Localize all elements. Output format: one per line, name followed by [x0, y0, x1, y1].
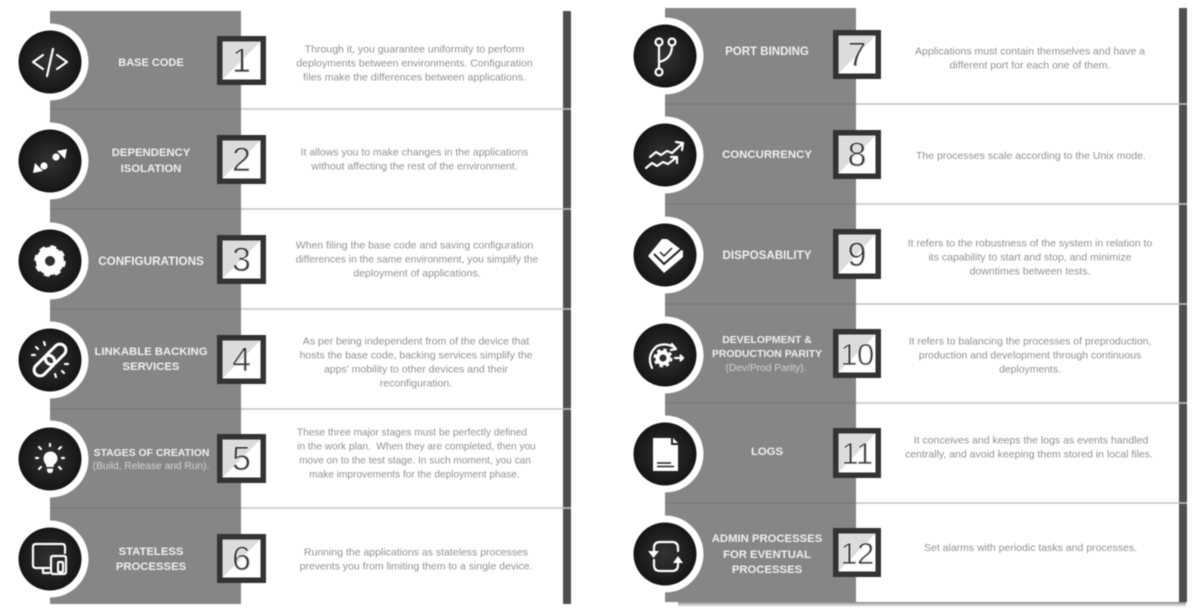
factor 3: configurations	[12, 222, 539, 300]
number box: 9	[848, 236, 866, 274]
factor 6: stateless processes	[12, 520, 532, 598]
number box	[217, 36, 266, 85]
description: Through it, you guarantee uniformity to perform	[305, 44, 524, 56]
number box	[217, 335, 266, 384]
description: downtimes between tests.	[970, 266, 1090, 278]
factor 5: stages of creation	[12, 420, 536, 498]
icon: light bulb	[12, 420, 88, 498]
description: make improvements for the deployment phase.	[309, 470, 520, 480]
icon: gear with arrow	[626, 316, 704, 394]
description: It refers to the robustness of the system in relation to	[908, 238, 1152, 250]
number box	[833, 428, 881, 478]
title: ISOLATION	[121, 163, 181, 175]
description: in the work plan. When they are completed, then you	[297, 442, 536, 452]
description: production and development through continuous	[919, 350, 1141, 362]
icon: branching fork	[626, 18, 704, 94]
description: It refers to balancing the processes of preproduction,	[909, 336, 1151, 348]
title: LOGS	[751, 446, 783, 458]
number box	[833, 329, 881, 378]
number box: 3	[232, 241, 251, 279]
icon: document	[626, 416, 704, 492]
number box	[217, 235, 266, 284]
title: (Dev/Prod Parity).	[726, 363, 806, 374]
title: PROCESSES	[116, 561, 187, 573]
title: LINKABLE BACKING	[95, 346, 208, 358]
factor 9: disposability	[626, 216, 1152, 294]
title	[93, 448, 209, 472]
factor 7: port binding	[626, 18, 1145, 94]
title: PRODUCTION PARITY	[712, 349, 822, 360]
icon: stacked check marks	[626, 216, 704, 294]
title: FOR EVENTUAL	[723, 549, 811, 561]
number box: 4	[232, 341, 251, 379]
icon: refresh arrows	[626, 516, 704, 592]
description: It allows you to make changes in the applications	[301, 146, 528, 158]
description: Running the applications as stateless processes	[304, 546, 528, 558]
description: These three major stages must be perfectly defined	[297, 428, 527, 438]
icon: devices	[12, 520, 88, 598]
description: The processes scale according to the Unix mode.	[916, 150, 1146, 162]
description: hosts the base code, backing services simplify the	[300, 350, 533, 362]
number box	[833, 130, 881, 179]
number box: 7	[848, 36, 866, 74]
description: As per being independent from of the device that	[303, 336, 529, 348]
number box	[833, 528, 881, 577]
number box	[833, 229, 881, 279]
description: its capability to start and stop, and minimize	[928, 252, 1132, 264]
icon: broken chain	[12, 322, 88, 398]
factor 8: concurrency	[626, 116, 1146, 194]
description: Applications must contain themselves and have a	[915, 46, 1145, 58]
description: apps' mobility to other devices and their	[324, 364, 509, 376]
description: move on to the test stage. In such moment, you can	[299, 456, 531, 466]
factor 1: base code	[12, 24, 533, 100]
number box	[833, 30, 881, 79]
description: When filing the base code and saving configuration	[296, 240, 533, 252]
title: STATELESS	[119, 546, 184, 558]
factor 2: dependency isolation	[12, 122, 528, 200]
number box: 6	[232, 540, 251, 578]
number box: 2	[232, 141, 251, 179]
number box: 11	[841, 436, 873, 471]
panel: right column, factors 7 to 12	[626, 8, 1187, 607]
number box: 1	[232, 42, 251, 80]
description: reconfiguration.	[380, 378, 452, 390]
description: deployment of applications.	[353, 268, 481, 280]
title: DEVELOPMENT &	[722, 335, 812, 346]
factor 11: logs	[626, 416, 1153, 492]
title	[712, 335, 822, 374]
title: DISPOSABILITY	[723, 249, 812, 262]
description: without affecting the rest of the environment.	[310, 160, 518, 172]
description: It conceives and keeps the logs as events handled	[914, 434, 1148, 446]
description: deployments between environments. Configuration	[296, 58, 533, 70]
description: deployments.	[999, 364, 1061, 376]
title: ADMIN PROCESSES	[712, 533, 823, 545]
title: DEPENDENCY	[112, 147, 191, 159]
number box: 10	[840, 337, 874, 372]
title: CONFIGURATIONS	[98, 255, 204, 268]
factor 12: admin processes	[626, 516, 1137, 592]
title: BASE CODE	[118, 57, 184, 69]
description: files make the differences between applications.	[303, 72, 526, 84]
panel: left column, factors 1 to 6	[12, 11, 571, 604]
description: centrally, and avoid keeping them stored in local files.	[905, 448, 1153, 460]
title: SERVICES	[123, 361, 180, 373]
number box: 12	[840, 536, 874, 571]
title: STAGES OF CREATION	[94, 448, 209, 459]
icon: diagonal arrows	[12, 122, 88, 200]
number box	[217, 434, 266, 483]
number box: 8	[848, 136, 866, 174]
title: PORT BINDING	[725, 46, 809, 58]
title: PROCESSES	[732, 564, 803, 576]
number box	[217, 135, 266, 184]
title: (Build, Release and Run).	[93, 461, 209, 472]
icon: double trend arrows	[626, 116, 704, 194]
description: prevents you from limiting them to a single device.	[300, 560, 532, 572]
icon: gear	[12, 222, 88, 300]
description: different port for each one of them.	[950, 60, 1110, 72]
factor 10: development and production parity	[626, 316, 1151, 394]
number box	[217, 534, 266, 583]
factor 4: linkable backing services	[12, 322, 533, 398]
number box: 5	[232, 440, 251, 478]
icon: code brackets	[12, 24, 88, 100]
title: CONCURRENCY	[722, 149, 812, 161]
description: Set alarms with periodic tasks and processes.	[924, 542, 1137, 554]
description: differences in the same environment, you simplify the	[296, 254, 539, 266]
